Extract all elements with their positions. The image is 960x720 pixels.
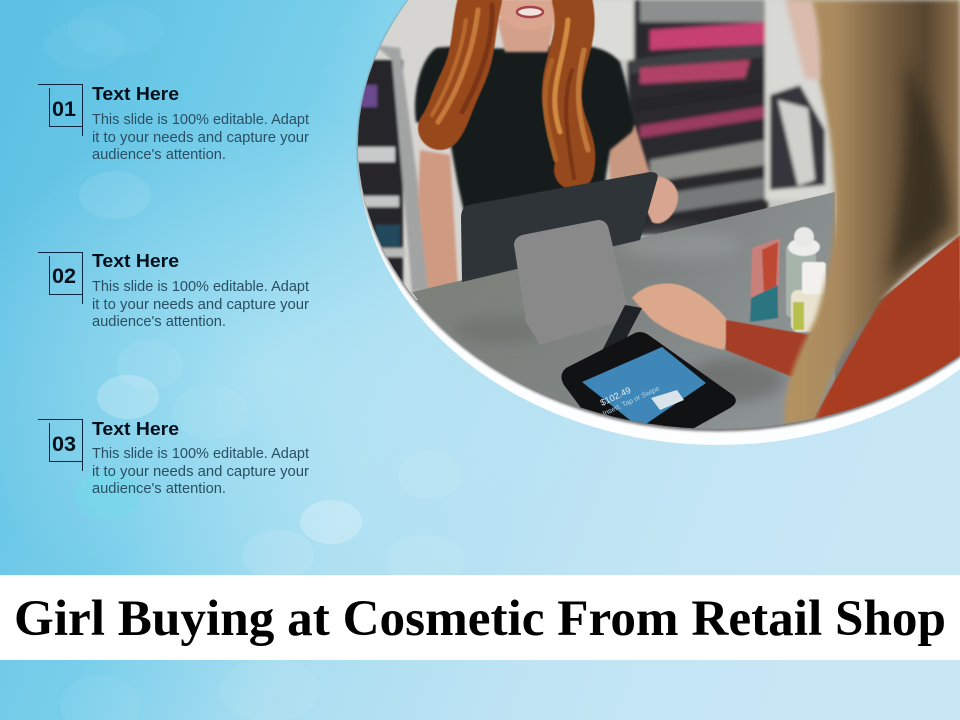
number 02: 02 bbox=[52, 265, 76, 288]
body text 02: audience's attention. bbox=[92, 314, 226, 330]
shop backdrop bbox=[350, 0, 960, 300]
shop assistant: red curly hair bbox=[432, 0, 588, 178]
shop assistant: neck bbox=[497, 18, 555, 52]
number bracket 02 bbox=[38, 252, 82, 304]
body text 03: audience's attention. bbox=[92, 481, 226, 497]
cosmetic products bbox=[750, 227, 827, 332]
shop assistant: mouth bbox=[517, 7, 543, 17]
title: Girl Buying at Cosmetic From Retail Shop bbox=[14, 591, 946, 647]
reader screen: Insert, Tap or Swipe bbox=[602, 385, 661, 418]
customer red sweater bbox=[726, 235, 960, 425]
number 03: 03 bbox=[52, 433, 76, 456]
point of sale tablet bbox=[461, 172, 658, 282]
number 01: 01 bbox=[52, 98, 76, 121]
assistant hand bbox=[644, 177, 678, 223]
reader screen bbox=[582, 347, 706, 428]
body text 02: This slide is 100% editable. Adapt bbox=[92, 279, 309, 295]
customer cheek bbox=[785, 0, 821, 80]
shop assistant: face bbox=[498, 0, 555, 29]
body text 02: it to your needs and capture your bbox=[92, 297, 309, 313]
body text 01: audience's attention. bbox=[92, 147, 226, 163]
shop assistant: arms bbox=[418, 125, 652, 290]
body text 01: This slide is 100% editable. Adapt bbox=[92, 112, 309, 128]
heading 02: Text Here bbox=[92, 251, 179, 271]
card reader bbox=[561, 332, 736, 436]
counter shadows bbox=[455, 231, 785, 402]
left shelving bbox=[358, 44, 429, 292]
item 01 bbox=[38, 84, 309, 163]
customer long hair bbox=[785, 0, 960, 425]
item 02 bbox=[38, 251, 309, 330]
item 03 bbox=[38, 419, 309, 497]
tablet stand bbox=[514, 220, 630, 345]
curved photo rim bbox=[358, 0, 960, 445]
circular photo: customer paying at cosmetic retail shop bbox=[350, 0, 960, 440]
number bracket 01 bbox=[38, 84, 82, 136]
body text 03 bbox=[92, 446, 309, 497]
body text 01: it to your needs and capture your bbox=[92, 130, 309, 146]
shop assistant: black dress bbox=[413, 44, 635, 212]
body text 01 bbox=[92, 112, 309, 163]
heading 01: Text Here bbox=[92, 84, 179, 104]
number bracket 03 bbox=[38, 420, 82, 471]
customer hand bbox=[632, 283, 730, 350]
title band bbox=[0, 575, 960, 660]
customer hair dark underside bbox=[888, 60, 950, 280]
body text 02 bbox=[92, 279, 309, 330]
reader screen: $102.49 bbox=[599, 385, 632, 408]
heading 03: Text Here bbox=[92, 419, 179, 439]
body text 03: it to your needs and capture your bbox=[92, 464, 309, 480]
body text 03: This slide is 100% editable. Adapt bbox=[92, 446, 309, 462]
cosmetic shelves bbox=[586, 0, 830, 235]
payment card bbox=[602, 305, 642, 350]
counter bbox=[412, 192, 835, 440]
